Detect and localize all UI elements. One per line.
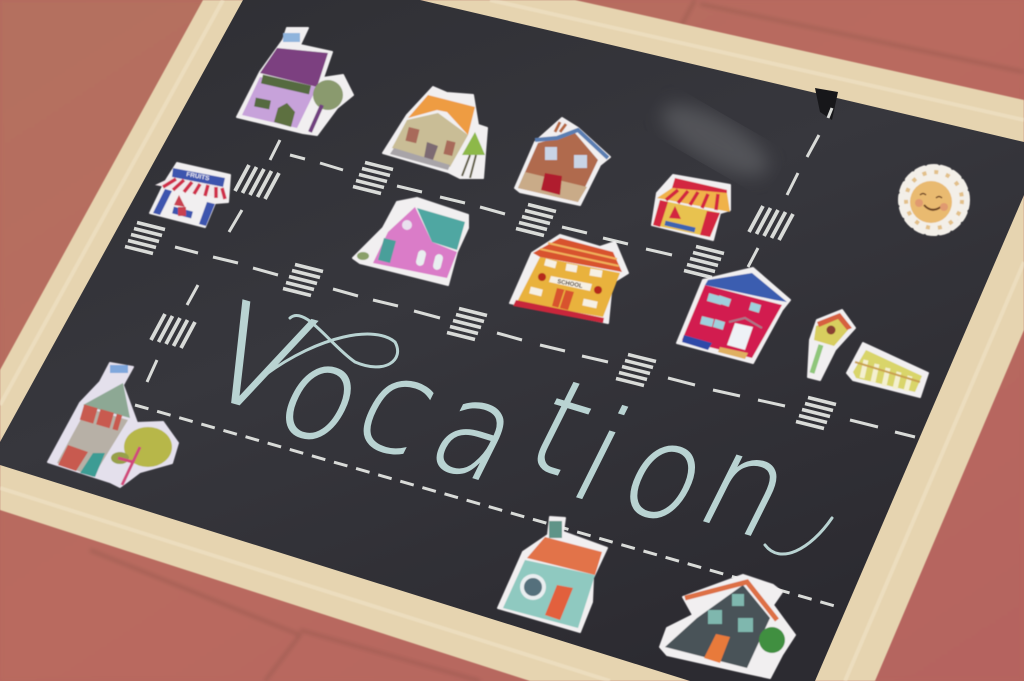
sticker: purple house with tree [237,28,353,135]
chalk smudge [652,91,778,189]
sticker: orange roof house [383,87,487,178]
sticker: red house [677,268,790,363]
upper road centre line [290,155,672,255]
sticker: green roof house with tree [48,363,178,487]
middle road centre line [175,247,915,437]
sticker: yellow fence [847,343,928,397]
title: Vocation chalk lettering: Vocation [149,275,851,567]
label: FRUITS: FRUITS [186,171,211,183]
sticker: brick house [515,118,610,205]
crosswalks [125,162,836,428]
sticker: pink and teal house [353,198,468,285]
sticker: market stall [652,175,730,240]
sticker: dark house with tree [660,575,795,678]
chalk flourishes [265,315,832,554]
sticker: birdhouse [808,310,855,380]
tape mark [815,88,838,120]
sticker: fruits shop [150,163,230,227]
sticker: mint house [498,517,607,632]
right vertical road line [748,108,832,267]
label: SCHOOL: SCHOOL [557,279,583,290]
sticker: school [510,235,628,323]
road markings [135,108,915,606]
lower road centre line [135,405,835,606]
left vertical road line [147,140,280,382]
sticker: sun [901,167,967,233]
